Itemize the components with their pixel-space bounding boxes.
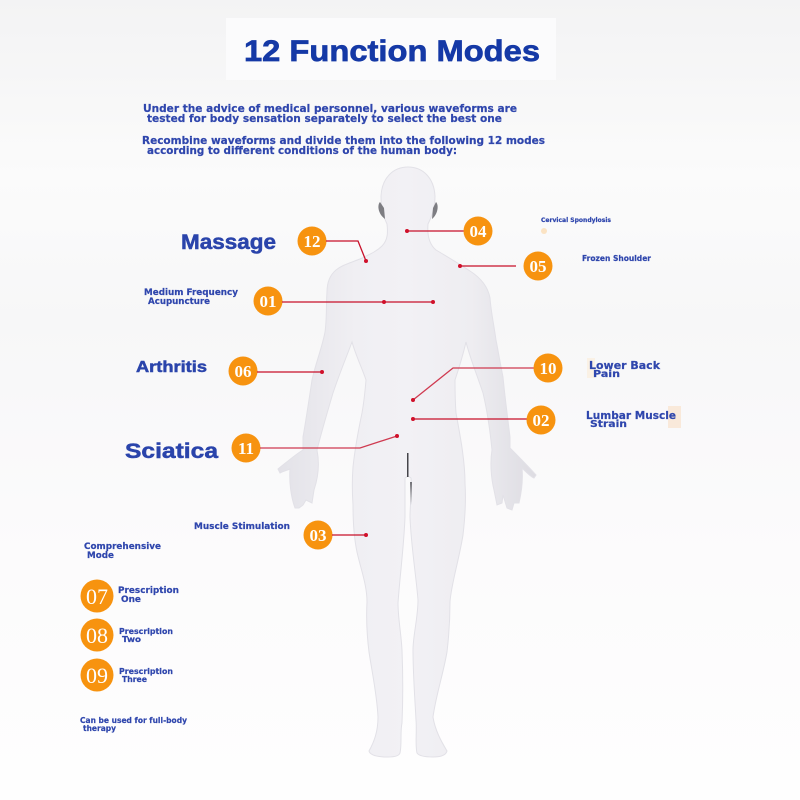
mode 09: Prescription Three: Prescription (119, 667, 173, 676)
callout 01: Medium Frequency Acupuncture: 01 (260, 292, 276, 311)
callout 06: Arthritis: Arthritis (136, 359, 207, 376)
comprehensive mode heading (84, 542, 161, 561)
full-body therapy note: therapy (83, 724, 117, 733)
callout 01: Medium Frequency Acupuncture: Acupuncture (148, 297, 210, 307)
human body back view (278, 167, 536, 757)
mode 07: Prescription One: 07 (86, 584, 108, 609)
callout 02: Lumbar Muscle Strain: 02 (532, 411, 550, 430)
mode 07: Prescription One: Prescription (118, 586, 179, 596)
title (226, 18, 556, 80)
callout 11: Sciatica: 11 (238, 439, 254, 458)
callout 01: Medium Frequency Acupuncture: Medium Frequency (144, 288, 238, 298)
callout 05: Frozen Shoulder: Frozen Shoulder (582, 254, 651, 263)
mode 09: Prescription Three (80, 658, 173, 692)
full-body therapy note: Can be used for full-body (80, 716, 188, 725)
mode 08: Prescription Two: 08 (86, 623, 108, 648)
callout 04: Cervical Spondylosis: 04 (470, 222, 487, 241)
callout 10: Lower Back Pain: Lower Back (589, 360, 661, 372)
mode 07: Prescription One (80, 580, 179, 612)
full-body therapy note (80, 716, 188, 733)
callout 05: Frozen Shoulder: 05 (530, 257, 546, 276)
callout 12: Massage (181, 226, 368, 263)
callout 02: Lumbar Muscle Strain (411, 406, 681, 434)
callout 03: Muscle Stimulation: 03 (310, 526, 326, 545)
callout 04: Cervical Spondylosis: Cervical Spondylosis (541, 217, 611, 224)
intro text: according to different conditions of the human body: (147, 145, 457, 157)
callout 11: Sciatica (125, 434, 399, 463)
mode 09: Prescription Three: Three (122, 675, 148, 684)
callout 12: Massage: 12 (304, 232, 320, 251)
callout 06: Arthritis (136, 356, 324, 386)
callout 04: Cervical Spondylosis (405, 216, 611, 246)
intro text (142, 103, 545, 157)
mode 07: Prescription One: One (121, 595, 141, 605)
intro text: tested for body sensation separately to select the best one (147, 113, 502, 125)
callout 11: Sciatica: Sciatica (125, 440, 218, 463)
comprehensive mode heading: Comprehensive (84, 542, 161, 552)
callout 12: Massage: Massage (181, 231, 276, 254)
callout 10: Lower Back Pain (411, 354, 661, 402)
intro text: Recombine waveforms and divide them into the following 12 modes (142, 135, 545, 147)
title: 12 Function Modes (244, 35, 540, 68)
callout 06: Arthritis: 06 (234, 362, 252, 381)
callout 02: Lumbar Muscle Strain: Lumbar Muscle (586, 410, 676, 422)
comprehensive mode heading: Mode (87, 551, 114, 561)
callout 10: Lower Back Pain: Pain (593, 369, 620, 380)
callout 10: Lower Back Pain: 10 (540, 359, 556, 378)
ears (378, 202, 438, 219)
mode 08: Prescription Two: Prescription (119, 627, 173, 636)
callout 03: Muscle Stimulation (194, 520, 368, 550)
callout 03: Muscle Stimulation: Muscle Stimulation (194, 522, 290, 532)
mode 08: Prescription Two (80, 618, 173, 652)
callout 01: Medium Frequency Acupuncture (144, 286, 435, 316)
mode 09: Prescription Three: 09 (86, 663, 108, 688)
mode 08: Prescription Two: Two (122, 635, 142, 644)
callout 02: Lumbar Muscle Strain: Strain (590, 419, 627, 430)
intro text: Under the advice of medical personnel, various waveforms are (143, 103, 517, 115)
callout 05: Frozen Shoulder (458, 252, 651, 280)
